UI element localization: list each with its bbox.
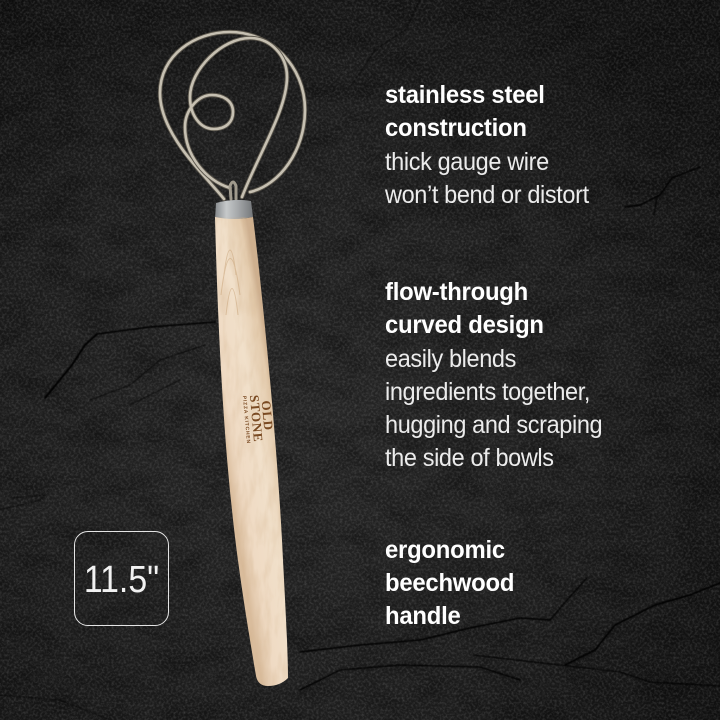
wooden handle: [215, 217, 288, 686]
size badge: 11.5 inches: 11.5": [84, 559, 159, 601]
feature: stainless steel construction: thick gauge wire: [385, 148, 549, 176]
feature: ergonomic beechwood handle: [385, 536, 514, 630]
brand logo burned on handle: PIZZA KITCHEN: [241, 396, 251, 444]
feature: flow-through curved design: curved design: [385, 311, 544, 339]
feature: flow-through curved design: hugging and scraping: [385, 411, 602, 439]
ferrule: [215, 200, 253, 220]
brand logo burned on handle: [241, 394, 276, 444]
feature: flow-through curved design: easily blends: [385, 345, 516, 373]
feature: stainless steel construction: won’t bend or distort: [385, 181, 589, 209]
feature: ergonomic beechwood handle: ergonomic: [385, 536, 505, 564]
feature: flow-through curved design: ingredients together,: [385, 378, 590, 406]
brand logo burned on handle: STONE: [247, 394, 266, 443]
feature: stainless steel construction: construction: [385, 114, 527, 142]
feature: ergonomic beechwood handle: beechwood: [385, 569, 514, 597]
feature: flow-through curved design: flow-through: [385, 278, 528, 306]
feature: stainless steel construction: stainless steel: [385, 81, 545, 109]
feature: ergonomic beechwood handle: handle: [385, 602, 461, 630]
feature: flow-through curved design: the side of bowls: [385, 444, 554, 472]
whisk wires: [160, 32, 305, 199]
size badge: 11.5 inches: [74, 531, 169, 626]
feature: flow-through curved design: [385, 278, 602, 472]
feature: stainless steel construction: [385, 81, 589, 209]
product: dough whisk: [158, 30, 308, 686]
brand logo burned on handle: OLD: [259, 400, 276, 431]
